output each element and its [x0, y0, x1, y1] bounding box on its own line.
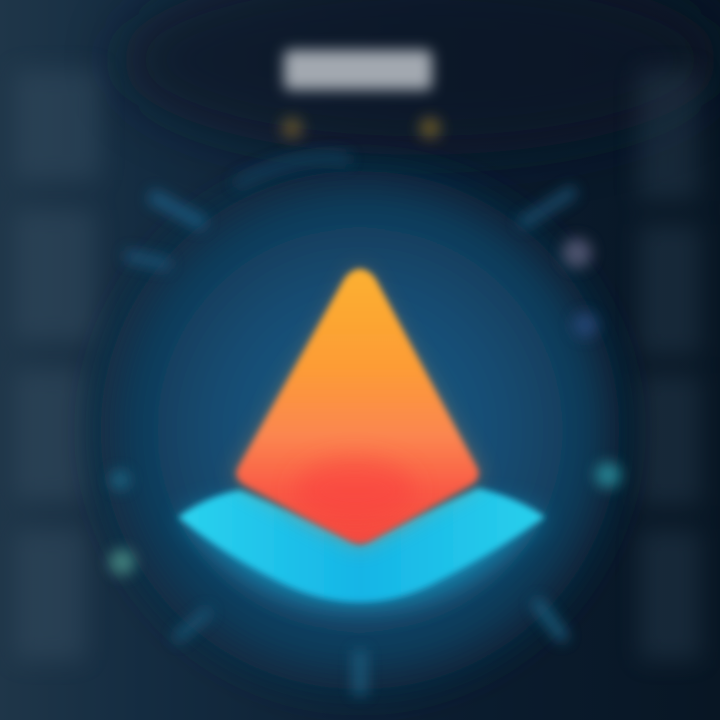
small amber markers under title [281, 117, 441, 139]
top dark vignette [120, 0, 720, 155]
triangle glow [235, 268, 480, 545]
wave glow [178, 501, 545, 610]
orange-red diamond [237, 269, 478, 544]
cyan wave base [178, 488, 545, 602]
red core glow [295, 458, 415, 522]
halo rays and nodes [109, 158, 621, 695]
left text column (illegible) [15, 70, 100, 660]
circular halo [75, 145, 645, 715]
title (illegible) [284, 50, 432, 90]
right text column (illegible) [638, 70, 700, 660]
